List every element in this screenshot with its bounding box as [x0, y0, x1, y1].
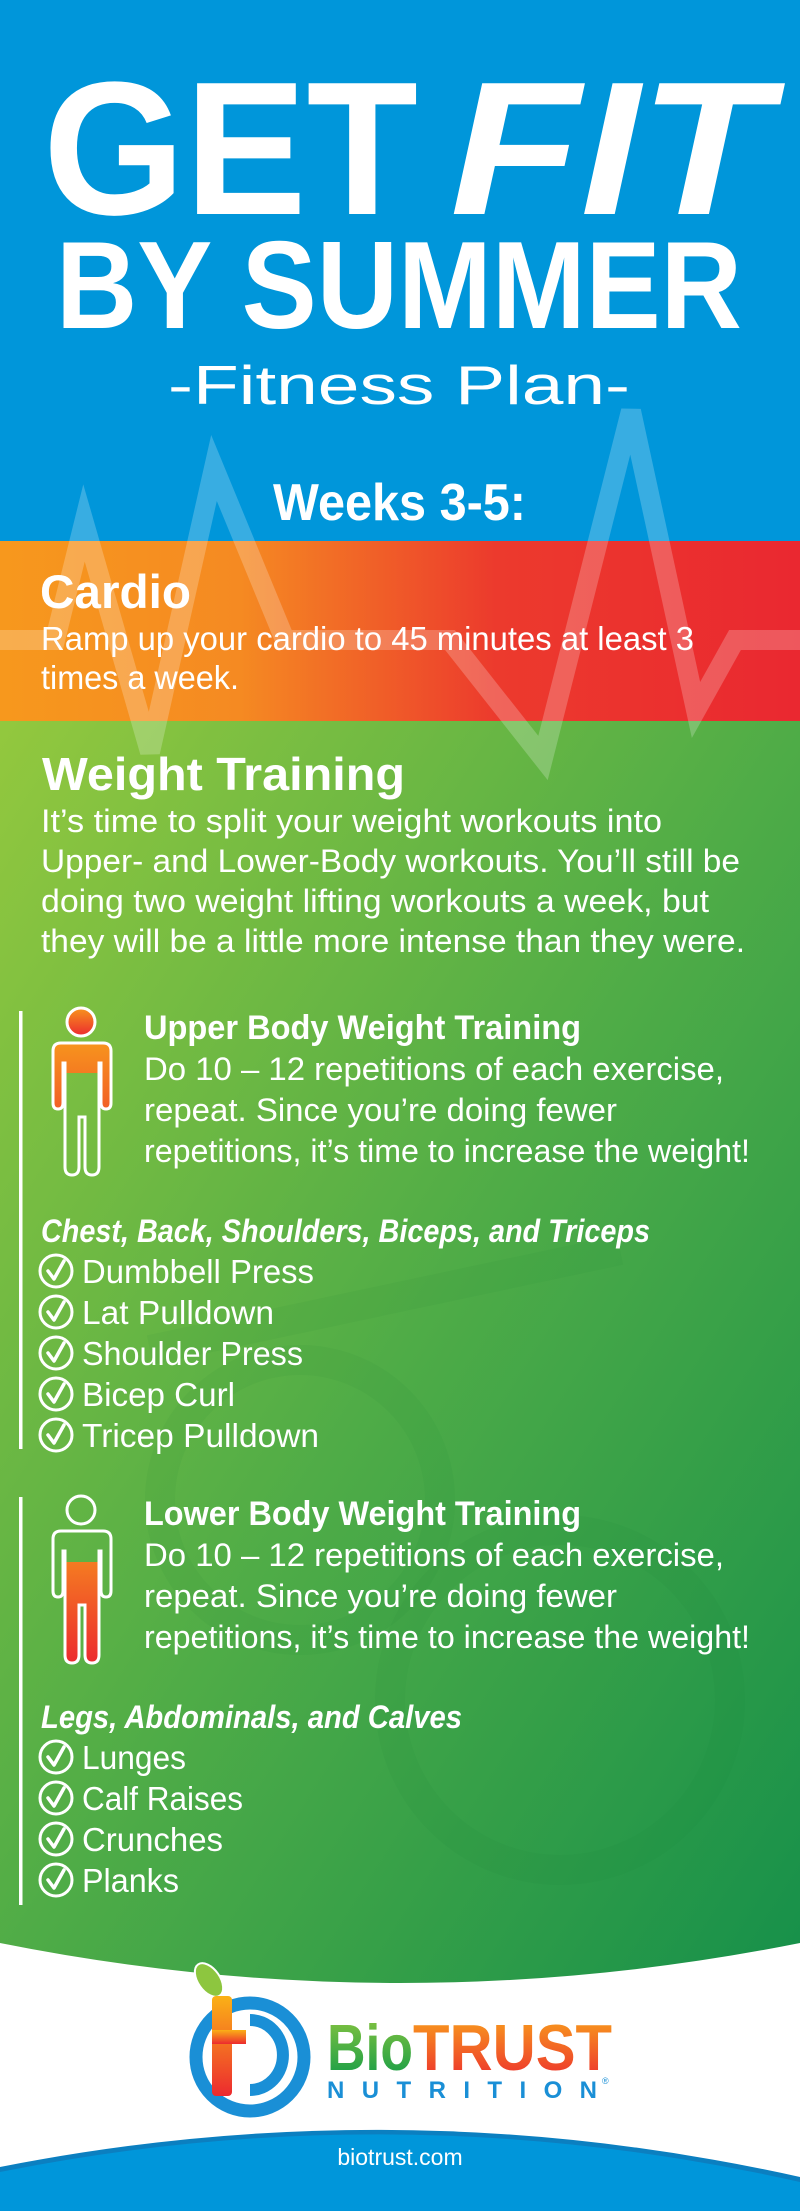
upper exercise list: Shoulder Press — [82, 1335, 303, 1372]
icon: leaf — [189, 1958, 229, 2002]
subtitle: -Fitness Plan- — [168, 354, 630, 416]
lower heading and text: Do 10 – 12 repetitions of each exercise, — [144, 1537, 724, 1573]
decorative dumbbell shapes — [150, 1250, 730, 1870]
logo: ® — [602, 2076, 609, 2086]
upper exercise list: Chest, Back, Shoulders, Biceps, and Triceps — [41, 1213, 650, 1249]
weight training intro: Upper- and Lower-Body workouts. You’ll still be — [41, 843, 740, 879]
upper exercise list: Bicep Curl — [82, 1376, 235, 1413]
footer url: biotrust.com — [337, 2144, 463, 2170]
upper heading and text: Upper Body Weight Training — [144, 1009, 581, 1047]
upper exercise list — [40, 1213, 650, 1454]
lower exercise list: Lunges — [82, 1739, 186, 1776]
weight training intro — [41, 748, 745, 959]
upper exercise list: Lat Pulldown — [82, 1294, 274, 1331]
title: FIT — [450, 43, 786, 255]
cardio text — [40, 565, 694, 696]
header background — [0, 0, 800, 541]
icon: lower body figure — [53, 1496, 111, 1663]
upper heading and text: repetitions, it’s time to increase the weight! — [144, 1133, 750, 1169]
weight training intro: doing two weight lifting workouts a week, but — [41, 883, 709, 919]
weight training intro: they will be a little more intense than they were. — [41, 923, 745, 959]
upper exercise list: Dumbbell Press — [82, 1253, 314, 1290]
upper heading and text — [144, 1009, 750, 1169]
title: GET — [43, 43, 418, 255]
logo: NUTRITION — [327, 2077, 597, 2104]
logo: TRUST — [413, 2011, 612, 2084]
panel: weight training green background — [0, 721, 800, 1983]
weight training intro: It’s time to split your weight workouts into — [41, 803, 662, 839]
weeks heading: Weeks 3-5: — [273, 474, 526, 532]
title — [43, 43, 786, 355]
lower exercise list: Legs, Abdominals, and Calves — [41, 1699, 462, 1735]
title: BY SUMMER — [56, 217, 742, 355]
upper heading and text: repeat. Since you’re doing fewer — [144, 1092, 617, 1128]
lower exercise list: Planks — [82, 1862, 179, 1899]
lower exercise list — [40, 1699, 462, 1899]
cardio text: times a week. — [41, 659, 239, 696]
lower heading and text: Lower Body Weight Training — [144, 1495, 581, 1533]
icon: upper body figure — [53, 1008, 111, 1175]
heartbeat line — [0, 411, 800, 758]
panel: cardio band — [0, 541, 800, 721]
footer wave — [0, 2130, 800, 2211]
upper heading and text: Do 10 – 12 repetitions of each exercise, — [144, 1051, 724, 1087]
cardio text: Ramp up your cardio to 45 minutes at least 3 — [41, 620, 694, 657]
lower exercise list: Calf Raises — [82, 1780, 243, 1817]
upper exercise list: Tricep Pulldown — [82, 1417, 319, 1454]
logo — [189, 1958, 612, 2111]
brand name: Bio — [327, 2011, 413, 2084]
icon: logo mark — [196, 1996, 304, 2111]
panel: upper body — [19, 1008, 750, 1454]
lower heading and text — [144, 1495, 750, 1655]
lower heading and text: repeat. Since you’re doing fewer — [144, 1578, 617, 1614]
cardio text: Cardio — [40, 565, 191, 618]
weight training intro: Weight Training — [42, 748, 405, 800]
lower exercise list: Crunches — [82, 1821, 223, 1858]
panel: lower body — [19, 1495, 750, 1905]
lower heading and text: repetitions, it’s time to increase the weight! — [144, 1619, 750, 1655]
